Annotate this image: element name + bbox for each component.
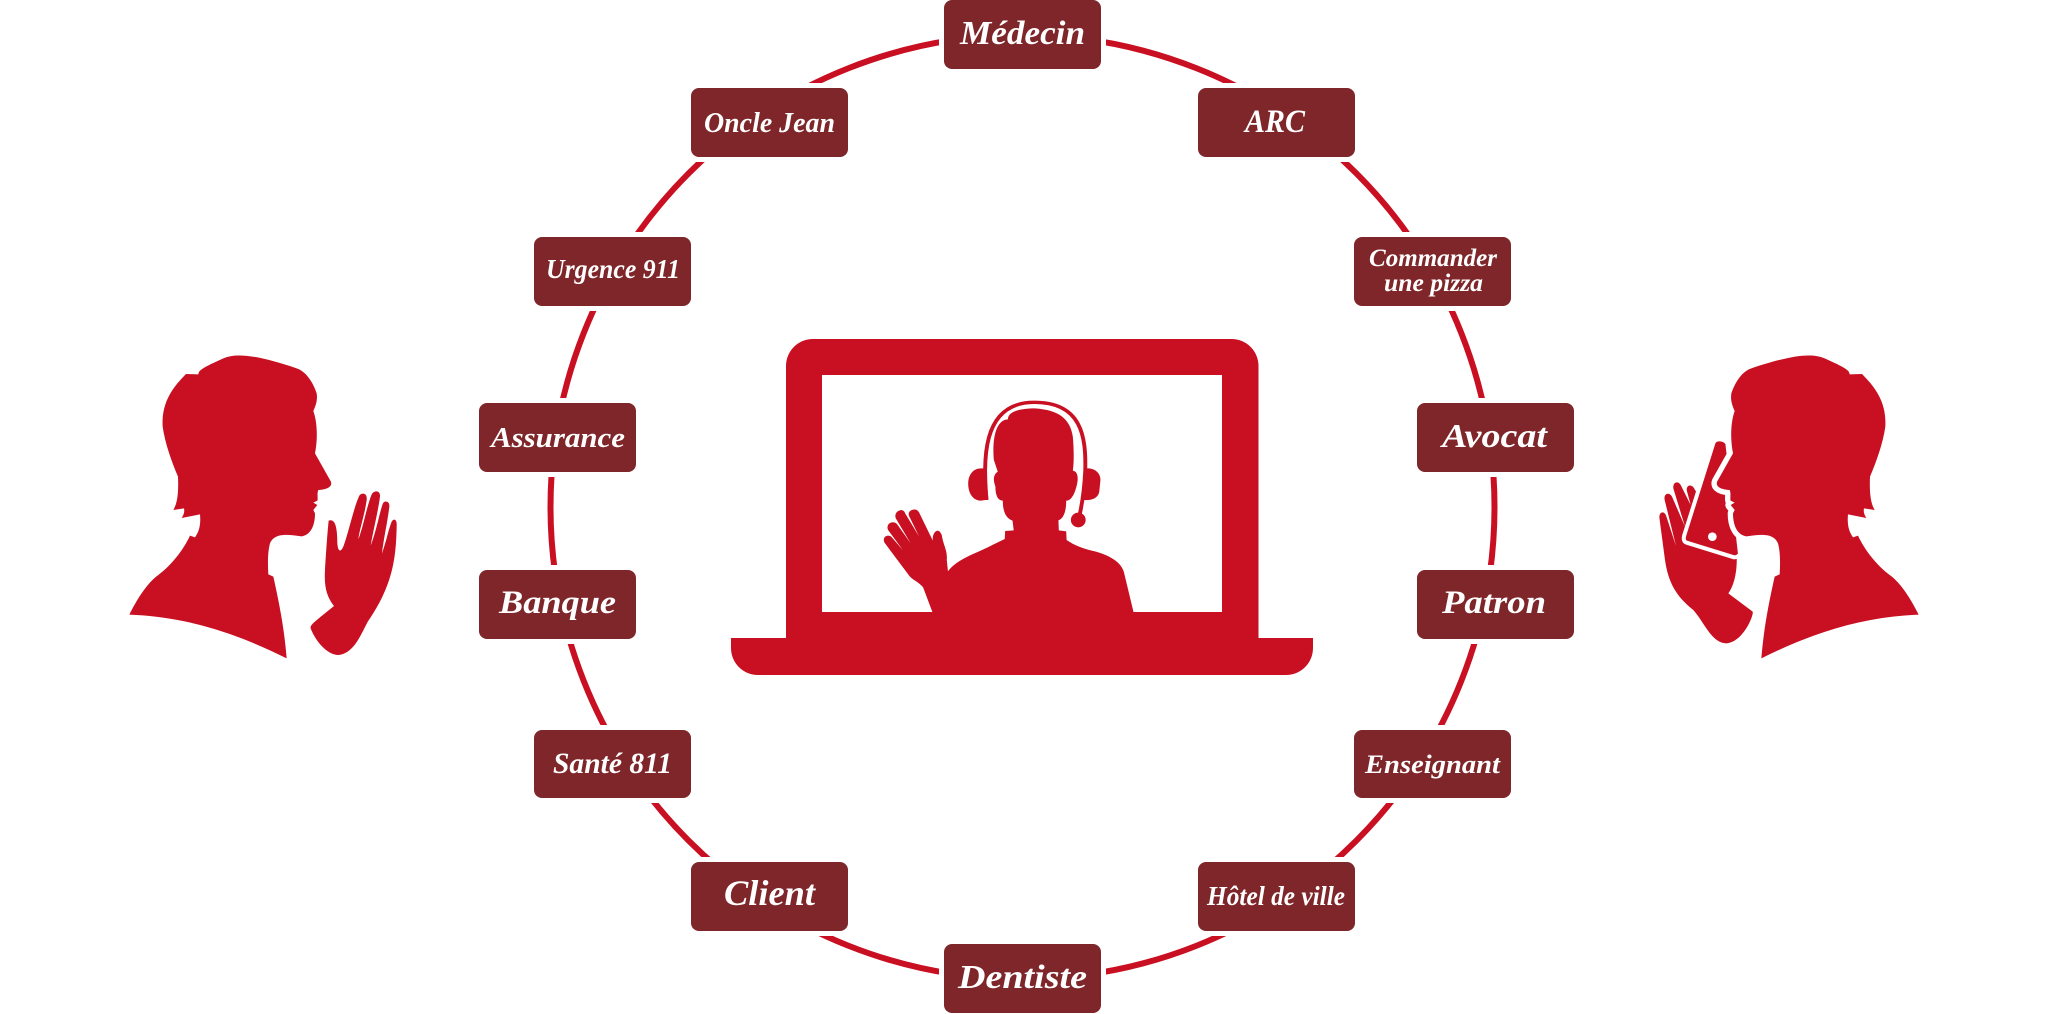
icon: laptop with agent wearing headset (731, 339, 1313, 675)
box: Assurance (474, 398, 641, 477)
box: Santé 811 (529, 725, 696, 803)
box: Assurance: Assurance (489, 423, 625, 454)
box: Dentiste (939, 939, 1106, 1014)
hand holding phone (1659, 482, 1753, 643)
ring connecting contacts (550, 35, 1494, 979)
box: Avocat (1412, 398, 1579, 477)
box: Client: Client (724, 873, 816, 913)
box: Enseignant (1349, 725, 1516, 803)
box: Urgence 911 (529, 232, 696, 311)
box: Dentiste: Dentiste (957, 959, 1087, 996)
phone (1684, 439, 1740, 557)
box: Commander une pizza: une pizza (1384, 270, 1483, 297)
box: Oncle Jean (686, 83, 853, 162)
box: Avocat: Avocat (1440, 418, 1549, 455)
raised hand (311, 491, 397, 655)
box: Enseignant: Enseignant (1364, 750, 1501, 779)
head and shoulders (1717, 355, 1919, 658)
box: Banque (474, 565, 641, 644)
headset agent silhouette (884, 402, 1134, 612)
icon: person whispering with raised hand (129, 355, 397, 658)
icon: person on the phone (1659, 355, 1919, 658)
box: Oncle Jean: Oncle Jean (704, 107, 835, 139)
box: Commander une pizza (1349, 232, 1516, 311)
phone button (1708, 532, 1717, 541)
box: ARC (1193, 83, 1360, 162)
box: ARC: ARC (1243, 104, 1306, 140)
box: Patron (1412, 565, 1579, 644)
box: Client (686, 857, 853, 936)
laptop frame (731, 339, 1313, 675)
box: Commander une pizza: Commander (1369, 245, 1497, 272)
box: Banque: Banque (498, 585, 616, 621)
box: Hôtel de ville (1193, 857, 1360, 936)
box: Médecin: Médecin (959, 15, 1085, 52)
box: Patron: Patron (1441, 585, 1546, 621)
box: Santé 811: Santé 811 (553, 747, 672, 780)
box: Médecin (939, 0, 1106, 74)
box: Urgence 911: Urgence 911 (546, 254, 680, 284)
head and shoulders (129, 355, 331, 658)
box: Hôtel de ville: Hôtel de ville (1206, 881, 1345, 911)
